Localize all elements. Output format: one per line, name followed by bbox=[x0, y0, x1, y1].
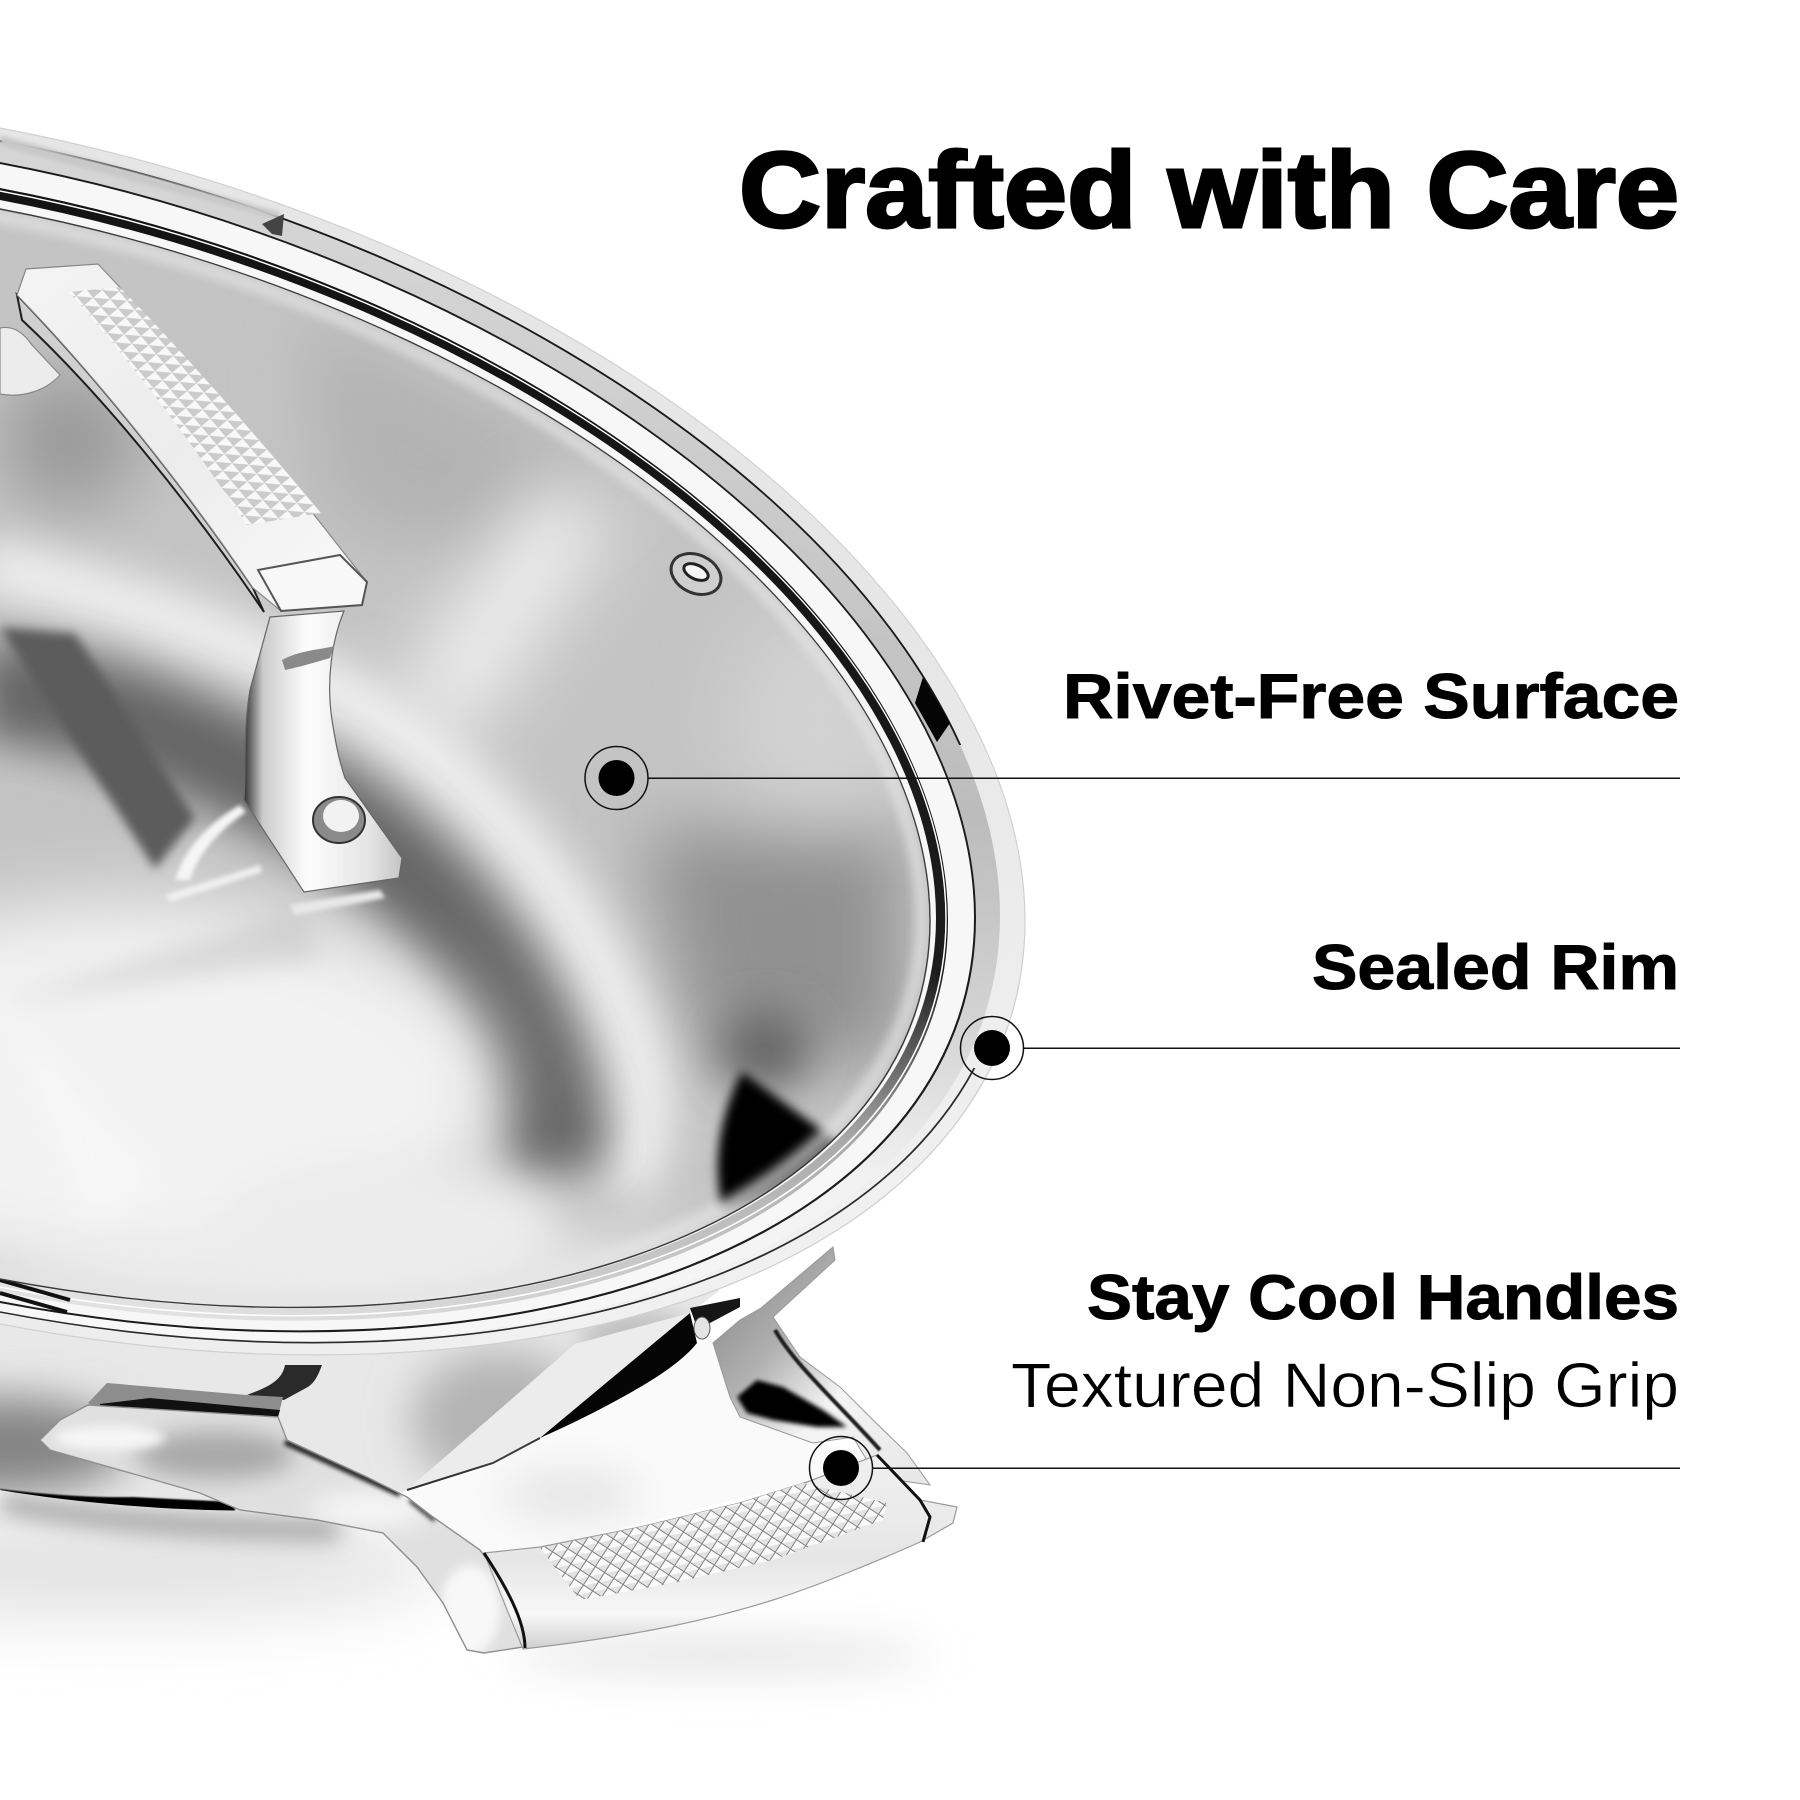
pot body bbox=[0, 1290, 720, 1510]
interior: reflections under the lid handle bbox=[165, 805, 385, 915]
diagonal light facet bbox=[407, 1313, 690, 1490]
grip: left seam bbox=[484, 1553, 525, 1648]
black wedge on the pot wall bbox=[540, 1313, 697, 1438]
right arm: edge reflection bbox=[775, 1330, 880, 1450]
callout: rivet-free surface bbox=[585, 662, 1680, 810]
marker bbox=[585, 746, 648, 810]
left arm: top bar bbox=[88, 1383, 283, 1417]
lid handle bbox=[0, 264, 402, 892]
pot wall lower edge line bbox=[407, 1438, 540, 1490]
lid handle: underside bbox=[17, 295, 264, 612]
left arm: neck bbox=[247, 1365, 322, 1400]
interior: bright diagonal band bbox=[450, 530, 560, 690]
interior: bright wall highlight sweeping to the strip bbox=[0, 565, 644, 1190]
bottom handle, grip bbox=[484, 1455, 957, 1649]
label: Sealed Rim bbox=[1312, 933, 1679, 1003]
rim: grey band bbox=[0, 0, 1000, 1501]
left arm: outline bbox=[40, 1405, 526, 1653]
lid knob vent bbox=[664, 546, 728, 602]
interior: textured dark band bbox=[0, 628, 195, 869]
label: Stay Cool Handles bbox=[1087, 1263, 1679, 1333]
callout: sealed rim bbox=[960, 933, 1680, 1080]
leader line bbox=[873, 1468, 1680, 1469]
interior: bright base bbox=[0, 900, 500, 1280]
lid handle: textured panel bbox=[69, 287, 321, 525]
leader line bbox=[1023, 1048, 1680, 1049]
right arm: collar bbox=[690, 1298, 740, 1323]
pot base dark crescent bbox=[0, 1488, 236, 1510]
title: Crafted with Care bbox=[739, 129, 1679, 250]
lid handle: left arm stub bbox=[0, 327, 60, 395]
bottom handle, right arm bbox=[690, 1247, 930, 1485]
interior: radial brushed rays bbox=[64, 917, 314, 993]
right arm: dark reflection bbox=[737, 1380, 847, 1427]
white reflection beneath the pot between the handle arms bbox=[407, 1343, 877, 1553]
illustration: stainless steel pot with glass lid bbox=[0, 0, 1025, 1660]
grip: textured panel bbox=[540, 1483, 887, 1600]
interior: dark crescent of the base bbox=[0, 690, 556, 1170]
rim: outer black line, lower right bbox=[0, 1068, 976, 1344]
lid handle: grip body bbox=[17, 264, 367, 611]
leader line bbox=[648, 778, 1680, 779]
callout: stay cool handles bbox=[810, 1263, 1680, 1500]
interior: dark shade above black reflection bbox=[720, 1010, 810, 1090]
lid handle: rivet bbox=[313, 797, 365, 843]
right arm: bracket and blade bbox=[713, 1247, 930, 1485]
rim: thin white line in band bbox=[0, 11, 946, 1467]
rim: mid ring bbox=[0, 0, 975, 1487]
lid handle: arm bbox=[244, 611, 402, 892]
lid handle: end cap bbox=[258, 555, 367, 611]
rim: outer ring bbox=[0, 0, 1025, 1519]
rim: specular highlights bbox=[0, 135, 950, 1312]
marker bbox=[810, 1436, 872, 1500]
floor shadow bbox=[0, 1502, 930, 1669]
lid glass and pan interior seen through it bbox=[0, 210, 930, 1306]
marker bbox=[960, 1016, 1024, 1080]
rim: outer black line, top bbox=[0, 140, 962, 745]
bottom handle, left arm bbox=[30, 1365, 540, 1660]
interior: broad wall shading bbox=[0, 310, 910, 1340]
interior: bright edge glow bbox=[0, 210, 929, 1246]
label: Rivet-Free Surface bbox=[1063, 662, 1679, 732]
grip: right seam bbox=[877, 1455, 930, 1542]
sub label: Textured Non-Slip Grip bbox=[1011, 1351, 1679, 1421]
left arm: main blade bbox=[41, 1406, 522, 1652]
rim: dark reflection band bbox=[0, 15, 942, 1465]
interior: black reflection bbox=[718, 1072, 835, 1208]
glass edge line bbox=[0, 32, 930, 1456]
